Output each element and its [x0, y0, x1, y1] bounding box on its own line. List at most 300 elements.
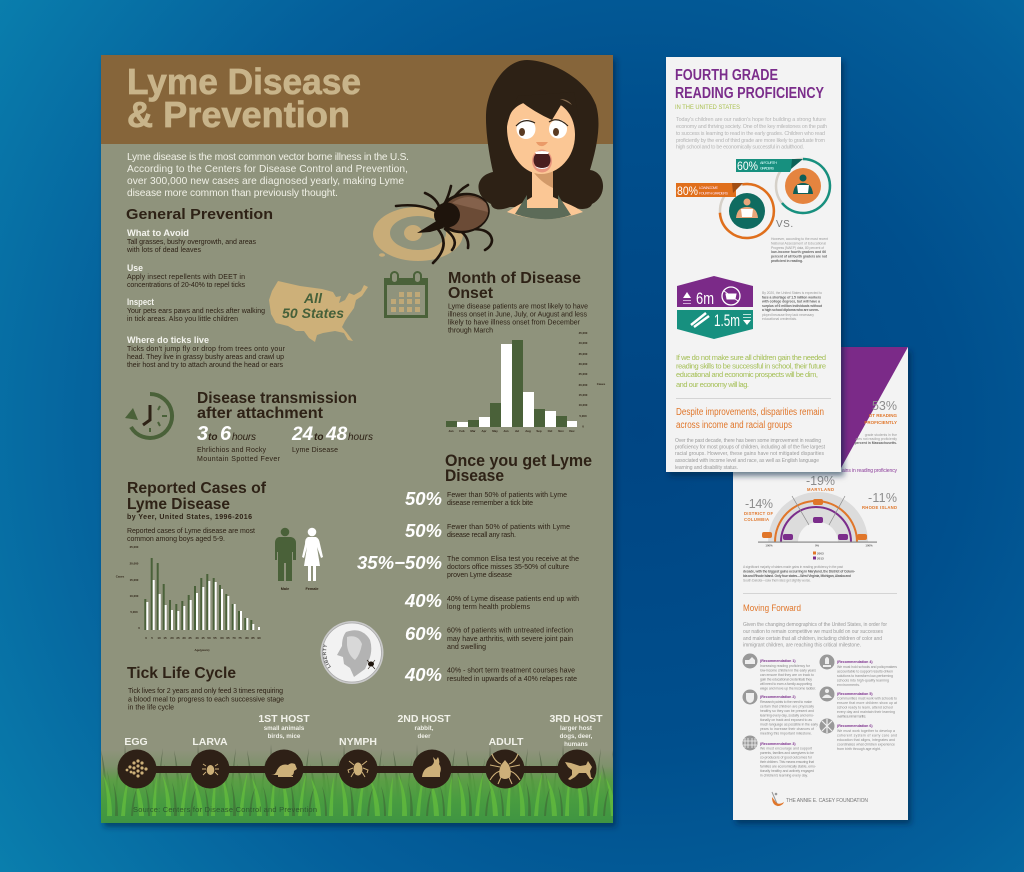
- section: month of disease onset: Onset: [448, 285, 493, 302]
- intro text: [127, 152, 409, 199]
- stage: nymph: NYMPH: [339, 736, 377, 748]
- chart: cases by age: 20,000: [130, 562, 139, 566]
- stat: 24 to 48 hours: 24: [291, 424, 314, 445]
- chart: semicircle state gains: 2003: [817, 552, 824, 556]
- stat: 40 percent long term: 40%: [404, 590, 442, 611]
- chart: cases by age: 15,000: [130, 578, 139, 582]
- stage: adult: [486, 736, 524, 788]
- intro text: According to the Centers for Disease Control and Prevention,: [127, 164, 408, 175]
- header band: [101, 55, 613, 144]
- chart: cases by month: 30,000: [579, 362, 588, 366]
- intro text: Lyme disease is the most common vector borne illness in the U.S.: [127, 152, 409, 163]
- chart: cases by age: Cases: [116, 574, 125, 578]
- icon: male and female figures: Male: [281, 587, 289, 591]
- section: month of disease onset: [448, 270, 588, 334]
- recommendation 3: in children's learning every day.: [760, 774, 808, 778]
- recommendation 1: gain the educational credentials they: [760, 678, 812, 682]
- panel: front report page: [666, 57, 841, 472]
- tip: what to avoid: with lots of dead leaves: [126, 247, 202, 254]
- stat: 60 percent all fourth graders: All FOURTH: [760, 161, 777, 165]
- tip: where ticks live: head. They live in grassy bushy areas and crawl up: [127, 354, 284, 361]
- chart: cases by month: Feb: [459, 429, 465, 433]
- recommendation 3: (Recommendation 3): [760, 742, 796, 746]
- chart: cases by month: 15,000: [579, 393, 588, 397]
- stage: adult: ADULT: [489, 736, 524, 748]
- chart: semicircle state gains: 100%: [765, 544, 773, 548]
- recommendation 1: (Recommendation 1): [760, 659, 796, 663]
- recommendation 1: low-income children in the early years: [760, 668, 816, 672]
- recommendation 2: [742, 690, 818, 736]
- vs label: VS.: [776, 219, 794, 230]
- recommendation 4: We must hold schools and policymakers: [837, 665, 897, 669]
- chart: cases by age: 5,000: [130, 610, 138, 614]
- section: reported cases: Reported cases of Lyme disease are most: [127, 528, 255, 535]
- text: disparities: racial groups. However, these gains have not mitigated disparities: [675, 451, 824, 457]
- text: NAEP note: National Assessment of Educational: [771, 242, 826, 246]
- stat: 50 percent rash: disease recall any rash.: [447, 532, 516, 539]
- section: month of disease onset: likely to have illness onset from December: [448, 320, 581, 326]
- stage: first host: 1ST HOST: [258, 713, 310, 725]
- chart: cases by age: 5: [151, 636, 153, 640]
- chart: cases by age: [116, 545, 261, 652]
- text: NAEP note: proficient in reading.: [771, 259, 803, 263]
- section: once you get Lyme disease: Disease: [445, 467, 504, 485]
- icon: male and female figures: [275, 528, 323, 591]
- stage: second host: 2ND HOST: [397, 713, 451, 725]
- logo: Annie E. Casey Foundation: THE ANNIE E. CASEY FOUNDATION: [786, 798, 868, 804]
- stage: first host: birds, mice: [268, 733, 301, 740]
- stat: 50 percent rash: 50%: [405, 520, 442, 541]
- text: shortage note: with college degrees, but will have a: [761, 300, 820, 304]
- stat: 40 percent long term: [404, 590, 579, 611]
- text: moving forward intro: [743, 622, 887, 648]
- heading: moving forward: Moving Forward: [743, 603, 801, 614]
- recommendation 2: meeting this important milestone.: [760, 732, 812, 736]
- stat: 3 to 6 hours: [197, 423, 256, 445]
- chart: cases by age: 30: [182, 636, 186, 640]
- stat: 3 to 6 hours: to: [208, 432, 217, 443]
- panel: back report page: [733, 347, 908, 820]
- stage: third host: dogs, deer,: [560, 733, 593, 740]
- text: NAEP note: low-income fourth graders and 66: [771, 250, 826, 254]
- text: disparities: Over the past decade, there has been some improvement in reading: [675, 438, 821, 444]
- section: month of disease onset: illness onset in June, July, or August and less: [448, 312, 588, 318]
- stage: third host: [549, 713, 603, 788]
- recommendation 4: accountable to support results-driven: [837, 670, 893, 674]
- chart: cases by month: Apr: [482, 429, 487, 433]
- tip: inspect: Inspect: [127, 296, 154, 307]
- chart: semicircle state gains: 2013: [817, 556, 824, 560]
- text: shortage note: face a shortage of 1.5 million workers: [762, 296, 821, 300]
- intro text: over 300,000 new cases are diagnosed yearly, making Lyme: [127, 176, 404, 187]
- quote: reading skills to be successful in school, their future: [676, 362, 826, 370]
- title: Lyme Disease: [127, 61, 361, 102]
- text: shortage note: surplus of 6 million individuals without: [762, 304, 823, 308]
- chart: cases by month: [446, 331, 606, 433]
- recommendation 3: We must encourage and support: [760, 746, 812, 750]
- chart: cases by month: 10,000: [579, 403, 588, 407]
- section: reported cases: [127, 480, 267, 543]
- tip: what to avoid: What to Avoid: [127, 227, 189, 238]
- chart: cases by month: Oct: [548, 429, 552, 433]
- stage: first host: small animals: [264, 725, 305, 732]
- text: disparities: learning and disability status.: [675, 465, 738, 471]
- stat: 60 percent arthritis: and swelling: [447, 644, 486, 651]
- icon: US map all 50 states: All: [303, 290, 323, 306]
- recommendation 4: schools into high-quality learning: [837, 678, 889, 682]
- chart: cases by month: Jun: [503, 429, 509, 433]
- stat: 60 percent arthritis: [405, 623, 573, 651]
- stat: 80 percent low-income: 80%: [677, 184, 698, 198]
- stat: 53 percent: OT READING: [869, 413, 897, 418]
- recommendation 2: healthy so they can be present and: [760, 709, 814, 713]
- stat: 60 percent all fourth graders: GRADERS: [760, 166, 774, 170]
- recommendation 6: coherent system of early care and: [837, 734, 897, 738]
- stat: 50 percent rash: Fewer than 50% of patients with Lyme: [447, 524, 570, 531]
- stat: 3 to 6 hours: 3: [197, 423, 208, 445]
- stat: 80 percent low-income: [676, 180, 778, 242]
- section: reported cases: Lyme Disease: [127, 496, 230, 513]
- text: intro: high school and to be economically successful in adulthood.: [676, 144, 804, 150]
- stage: third host: humans: [564, 741, 588, 748]
- tip: use: concentrations of 20-40% to repel ticks: [127, 282, 246, 289]
- recommendation 1: Increasing reading proficiency for: [760, 664, 811, 668]
- tip: use: [127, 262, 246, 289]
- section: tick life cycle: Tick Life Cycle: [127, 665, 236, 682]
- chart: cases by month: Cases: [597, 382, 606, 386]
- labels: state gains: RHODE ISLAND: [862, 505, 897, 510]
- recommendation 2: much language as possible in the early: [760, 722, 818, 726]
- chart: cases by age: 0: [138, 626, 140, 630]
- chart: cases by month: May: [492, 429, 498, 433]
- recommendation 3: tionally healthy and actively engaged: [760, 769, 814, 773]
- recommendation 4: [820, 654, 897, 687]
- section: disease transmission: Lyme Disease: [292, 447, 338, 454]
- recommendation 5: school ready to learn, attend school: [837, 706, 893, 710]
- recommendation 2: years to increase their chances of: [760, 727, 814, 731]
- text: shortage note: a high school diploma who are unem-: [762, 308, 819, 312]
- stat: 53 percent: ates not reading proficiently: [856, 437, 897, 441]
- stat: 24 to 48 hours: [291, 424, 373, 445]
- tip: what to avoid: Tall grasses, bushy overgrowth, and areas: [127, 239, 256, 246]
- chart: cases by age: 10: [157, 636, 161, 640]
- stat: 50 percent tick bite: disease remember a tick bite: [447, 500, 533, 507]
- recommendation 4: solutions to transform low-performing: [837, 674, 893, 678]
- chart: cases by month: 5,000: [579, 414, 587, 418]
- tip: inspect: in tick areas. Also you little children: [127, 316, 238, 323]
- heading: General Prevention: [126, 206, 273, 223]
- stage: second host: rabbit,: [415, 725, 434, 732]
- section: disease transmission: Disease transmission: [197, 390, 357, 407]
- section: tick life cycle: in the life cycle: [128, 704, 174, 712]
- chart: cases by month: 20,000: [579, 383, 588, 387]
- tip: use: Use: [127, 262, 143, 273]
- labels: state gains: MARYLAND: [807, 487, 834, 492]
- text: state gains note: bia and Rhode Island. Only four states—West Virginia, Michigan, Alaska and: [743, 574, 851, 578]
- recommendation 5: (Recommendation 5): [837, 692, 873, 696]
- stat: 35 to 50 percent Elisa: The common Elisa test you receive at the: [447, 556, 579, 563]
- icon: US map all 50 states: 50 States: [282, 305, 344, 321]
- chart: cases by age: 15: [163, 636, 167, 640]
- recommendation 2: learning every day, socially and emo-: [760, 714, 815, 718]
- stat: 24 to 48 hours: 48: [325, 424, 348, 445]
- section: disease transmission: after attachment: [197, 405, 323, 422]
- section: reported cases: common among boys aged 5-9.: [127, 536, 225, 543]
- text: intro: economy and thriving society. One of the key milestones on the path: [676, 124, 827, 130]
- section: tick life cycle: a blood meal to progress to each successive stage: [128, 696, 284, 704]
- chart: cases by age: 80: [245, 636, 249, 640]
- text: disparities: proficiency for most groups of children, including all of the five largest: [675, 444, 826, 450]
- stat: 80 percent low-income: LOW-INCOME: [699, 186, 718, 190]
- labels: state gains: -14%: [745, 497, 773, 511]
- title: [127, 61, 361, 135]
- icon: male and female figures: Female: [305, 587, 319, 591]
- chart: cases by month: Dec: [569, 429, 575, 433]
- title: FOURTH GRADE: [675, 67, 778, 84]
- chart: cases by age: 60: [220, 636, 224, 640]
- text: state gains note: South Dakota—saw their rates get slightly worse.: [743, 578, 811, 582]
- recommendation 6: (Recommendation 6): [837, 724, 873, 728]
- graphic: 6m and 1.5m shortage: [677, 276, 753, 339]
- heading: disparities: [676, 407, 824, 431]
- stage: nymph: [338, 736, 378, 788]
- labels: state gains: -19%: [806, 474, 835, 488]
- stat: 50 percent rash: [405, 520, 570, 541]
- labels: state gains: DISTRICT OF: [744, 511, 773, 516]
- stage: egg: EGG: [124, 736, 148, 748]
- text: moving forward intro: and make certain that all children, including children of color and: [743, 636, 882, 642]
- recommendation 6: We must work together to develop a: [837, 729, 895, 733]
- quote: If we do not make sure all children gain the needed: [676, 353, 826, 362]
- chart: cases by age: 75: [238, 636, 242, 640]
- chart: cases by age: 10,000: [130, 594, 139, 598]
- section: disease transmission: [197, 390, 373, 463]
- stat: 24 to 48 hours: to: [314, 432, 323, 443]
- chart: cases by age: 20: [170, 636, 174, 640]
- stat: 35 to 50 percent Elisa: doctors office misses 35-50% of culture: [447, 564, 569, 571]
- section: tick life cycle: [127, 665, 284, 712]
- chart: cases by age: 0: [145, 636, 147, 640]
- quote: [676, 353, 826, 389]
- recommendation 5: every day and maintain their learning: [837, 710, 895, 714]
- graphic: 6m and 1.5m shortage: 1.5m: [714, 311, 740, 330]
- chart: cases by age: 25: [176, 636, 180, 640]
- chart: cases by age: 55: [213, 636, 217, 640]
- chart: cases by age: Age(years): [195, 648, 210, 652]
- source: Source: Centers for Disease Control and Prevention: [133, 805, 317, 814]
- recommendation 1: will need to earn a family-supporting: [760, 682, 812, 686]
- text: state gains note: [743, 565, 855, 582]
- text: moving forward intro: our nation to remain competitive we must build on our successes: [743, 629, 884, 635]
- text: intro: Today's children are our nation's hope for building a strong future: [676, 117, 826, 123]
- stat: 3 to 6 hours: 6: [220, 423, 232, 445]
- tip: where ticks live: Ticks don't jump fly or drop from trees onto your: [127, 346, 286, 353]
- text: intro: to success is learning to read in the early grades. Children who read: [676, 131, 825, 137]
- subtitle: IN THE UNITED STATES: [675, 104, 741, 111]
- text: shortage note: By 2020, the United States is expected to: [762, 291, 822, 295]
- stat: 3 to 6 hours: hours: [232, 432, 256, 443]
- recommendation 3: co-producers of good outcomes for: [760, 756, 813, 760]
- stat: 60 percent arthritis: 60%: [405, 623, 442, 644]
- recommendation 5: over the summer months.: [837, 714, 866, 718]
- life cycle timeline: [118, 713, 603, 788]
- recommendation 1: [742, 654, 816, 690]
- recommendation 2: Research points to the need to make: [760, 700, 812, 704]
- stat: 40 percent relapse: [404, 664, 577, 685]
- stat: 53 percent: [855, 399, 897, 445]
- chart: cases by age: 65: [226, 636, 230, 640]
- text: disparities: associated with income level and race, as well as English language: [675, 458, 819, 464]
- stat: 50 percent tick bite: Fewer than 50% of patients with Lyme: [447, 492, 567, 499]
- stat: 80 percent low-income: FOURTH GRADERS: [699, 192, 728, 196]
- text: NAEP note: [771, 237, 828, 263]
- tip: what to avoid: [126, 227, 256, 254]
- recommendation 3: families are economically stable, emo-: [760, 764, 817, 768]
- recommendation 2: tionally on track and exposed to as: [760, 718, 812, 722]
- text: NAEP note: However, according to the most recent: [771, 237, 828, 241]
- stage: larva: [190, 736, 230, 788]
- chart: cases by month: 25,000: [579, 372, 588, 376]
- chart: cases by month: 0: [582, 424, 584, 428]
- recommendation 1: can ensure that they are on track to: [760, 673, 814, 677]
- text: state gains note: A significant majority of states made gains in reading proficiency in the past: [743, 565, 843, 569]
- section: general prevention: [126, 206, 286, 369]
- stat: 24 to 48 hours: hours: [348, 432, 373, 443]
- recommendation 3: parents, families and caregivers to be: [760, 751, 814, 755]
- chart: cases by month: Jul: [515, 429, 519, 433]
- stat: 40 percent relapse: 40%: [404, 664, 442, 685]
- text: intro: [676, 117, 827, 150]
- section: month of disease onset: Lyme disease patients are most likely to have: [448, 304, 588, 310]
- section: once you get Lyme disease: Once you get Lyme: [445, 452, 592, 470]
- chart: cases by age: 90: [257, 636, 261, 640]
- grass: [101, 744, 613, 823]
- icon: tick on bullseye rash: [373, 185, 494, 263]
- chart: semicircle state gains: 0%: [815, 544, 820, 548]
- section: reported cases: by Yeer, United States, 1996-2016: [127, 514, 252, 521]
- section: once you get Lyme disease: [357, 452, 592, 685]
- stat: 60 percent arthritis: may have arthritis, with severe joint pain: [447, 636, 573, 643]
- stat: 53 percent: percent in Massachusetts.: [855, 441, 897, 445]
- labels: state gains: -11%: [868, 491, 897, 505]
- stat: 40 percent relapse: resulted in upwards of a 40% relapes rate: [447, 676, 577, 683]
- chart: cases by age: 70: [232, 636, 236, 640]
- recommendation 2: (Recommendation 2): [760, 695, 796, 699]
- icon: dime with tick: [320, 621, 384, 684]
- title: & Prevention: [127, 94, 350, 135]
- stat: 53 percent: grade students in five: [865, 433, 897, 437]
- text: intro: proficiently by the end of third grade are more likely to graduate from: [676, 138, 826, 144]
- chart: cases by month: 45,000: [579, 331, 588, 335]
- recommendation 6: coordinates what children experience: [837, 742, 895, 746]
- title: READING PROFICIENCY: [675, 85, 825, 102]
- stage: egg: [118, 736, 156, 788]
- section: tick life cycle: Tick lives for 2 years and only feed 3 times requiring: [128, 688, 283, 695]
- stat: 60 percent arthritis: 60% of patients with untreated infection: [447, 628, 573, 634]
- chart: semicircle state gains: 100%: [865, 544, 873, 548]
- recommendation 1: wage and move up the income ladder.: [760, 686, 816, 690]
- panel: Lyme Disease infographic: [101, 55, 618, 830]
- stat: 53 percent: PROFICIENTLY: [864, 420, 897, 425]
- subheading: ains in reading proficiency: [842, 468, 898, 474]
- chart: cases by month: Aug: [525, 429, 531, 433]
- text: shortage note: educational credentials.: [762, 317, 797, 321]
- stat: 40 percent long term: 40% of Lyme disease patients end up with: [447, 596, 579, 603]
- icon: US map all 50 states: [269, 281, 368, 342]
- recommendation 6: from birth through age eight.: [837, 747, 881, 751]
- stat: 40 percent long term: long term health problems: [447, 604, 530, 611]
- recommendation 4: environments.: [837, 683, 860, 687]
- chart: cases by age: 85: [251, 636, 255, 640]
- stat: 50 percent tick bite: 50%: [405, 488, 442, 509]
- labels: state gains: [744, 474, 897, 522]
- purple triangle: [733, 347, 908, 468]
- title: [675, 67, 825, 102]
- recommendation 5: [820, 686, 897, 718]
- chart: cases by age: 25,000: [130, 545, 139, 549]
- icon: calendar: [384, 272, 428, 318]
- heading: disparities: Despite improvements, disparities remain: [676, 407, 824, 418]
- recommendation 3: their children. This means ensuring that: [760, 760, 814, 764]
- text: state gains note: decade, with the biggest gains occurring in Maryland, the District of Colum-: [743, 570, 855, 574]
- icon: clock with arrow: [125, 394, 172, 438]
- heading: disparities: across income and racial groups: [676, 420, 792, 431]
- logo: Annie E. Casey Foundation: [772, 792, 868, 806]
- section: month of disease onset: Month of Disease: [448, 270, 581, 287]
- quote: and our economy will lag.: [676, 380, 749, 389]
- chart: cases by month: Nov: [558, 429, 564, 433]
- recommendation 5: ensure that more children show up at: [837, 701, 897, 705]
- section: month of disease onset: through March: [448, 328, 493, 334]
- tip: inspect: Your pets ears paws and necks after walking: [127, 308, 265, 315]
- graphic: 6m and 1.5m shortage: 6m: [696, 289, 714, 308]
- stage: larva: LARVA: [192, 736, 228, 748]
- stage: first host: [258, 713, 310, 788]
- recommendation 5: Communities must work with schools to: [837, 696, 897, 700]
- chart: semicircle state gains: [758, 492, 877, 560]
- chart: cases by month: 35,000: [579, 352, 588, 356]
- stat: 50 percent tick bite: [405, 488, 567, 509]
- chart: cases by age: 50: [207, 636, 211, 640]
- text: NAEP note: Progress (NAEP) data, 80 percent of: [771, 246, 824, 250]
- chart: cases by month: Mar: [470, 429, 476, 433]
- text: moving forward intro: immigrant children, are reaching this critical milestone.: [743, 642, 861, 648]
- recommendation 6: education that aligns, integrates and: [837, 738, 895, 742]
- tip: where ticks live: [127, 334, 286, 369]
- section: disease transmission: Mountain Spotted Fever: [197, 456, 281, 463]
- stat: 60 percent all fourth graders: [736, 159, 830, 213]
- chart: cases by age: 40: [195, 636, 199, 640]
- recommendation 2: certain that children are physically: [760, 704, 814, 708]
- intro text: disease more common than previously thought.: [127, 188, 338, 199]
- recommendation 4: (Recommendation 4): [837, 660, 873, 664]
- chart: cases by age: 45: [201, 636, 205, 640]
- tip: where ticks live: Where do ticks live: [127, 334, 209, 345]
- chart: cases by month: Jan: [449, 429, 454, 433]
- section: reported cases: Reported Cases of: [127, 480, 267, 497]
- stat: 60 percent all fourth graders: 60%: [737, 159, 758, 173]
- recommendation 3: [742, 736, 817, 778]
- section: disease transmission: Ehrlichios and Rocky: [197, 447, 266, 454]
- chart: cases by month: Sep: [536, 429, 542, 433]
- stage: third host: 3RD HOST: [549, 713, 603, 725]
- stat: 53 percent: 53%: [872, 399, 897, 413]
- stat: 35 to 50 percent Elisa: 35%−50%: [357, 552, 442, 573]
- stat: 35 to 50 percent Elisa: [357, 552, 579, 579]
- text: shortage note: ployed because they lack necessary: [762, 313, 814, 317]
- stat: 40 percent relapse: 40% - short term treatment courses have: [447, 668, 575, 674]
- text: moving forward intro: Given the changing demographics of the United States, in order for: [743, 622, 887, 628]
